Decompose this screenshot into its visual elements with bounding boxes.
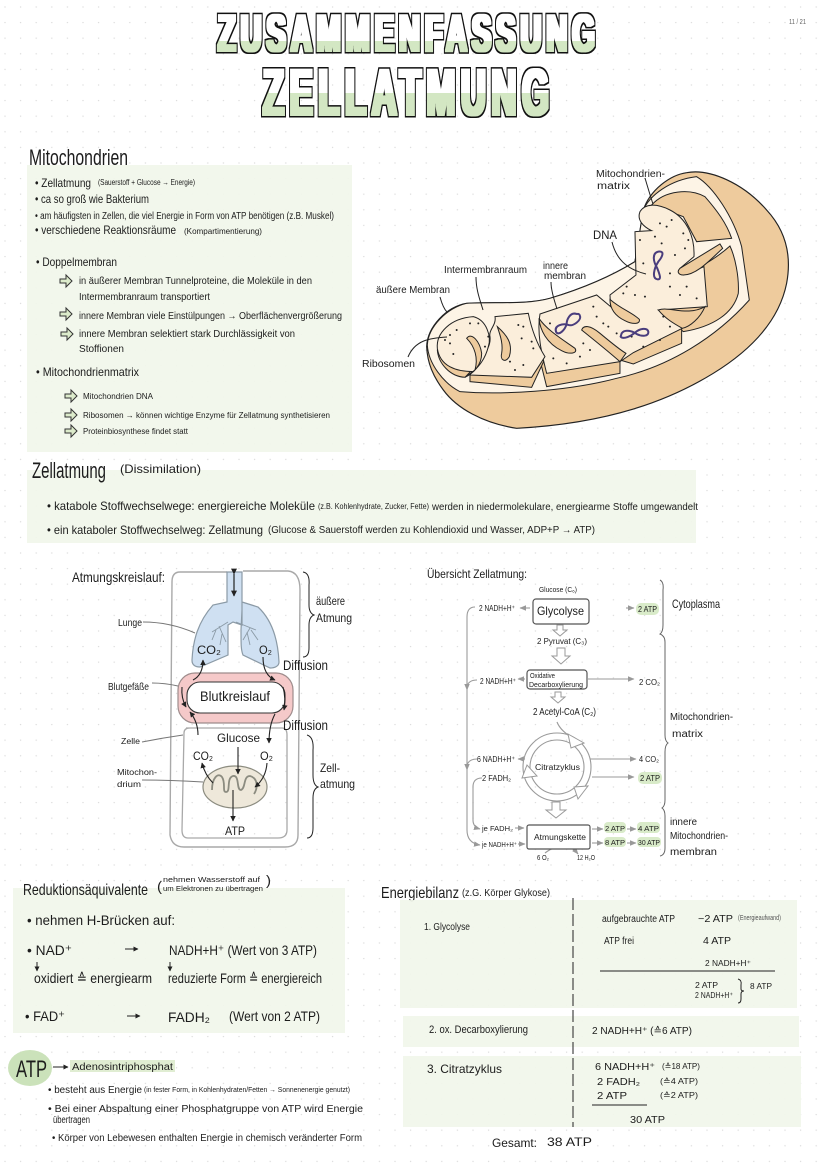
heading: Mitochondrien: Mitochondrien [29, 145, 128, 170]
icon: arrow [60, 275, 72, 287]
panel: Glycolyse balance: ATP frei [604, 936, 634, 947]
text: 2 Pyruvat: 2 Pyruvat (C₃) [537, 637, 587, 646]
row: NAD: reduzierte Form ≙ energiereich [168, 970, 322, 986]
text: ATP yields: 8 ATP [605, 840, 625, 847]
icon: breathing arrow [233, 574, 235, 596]
text: 2 CO2: 2 CO₂ [639, 678, 660, 687]
text block: general facts: • am häufigsten in Zellen, die viel Energie in Form von ATP benötigen (z.B. Muskel) [35, 211, 334, 222]
label: Ribosomen [362, 337, 447, 370]
arrows: gas exchange [182, 657, 285, 821]
label: Intermembranraum [444, 265, 527, 310]
page number: 11 / 21 [789, 19, 806, 26]
diagram: Übersicht Zellatmung [427, 567, 733, 862]
text block: general facts: • Zellatmung [35, 176, 91, 190]
cycle: Citratzyklus: Citratzyklus [535, 763, 580, 772]
icon: arrow [61, 328, 73, 340]
tan fingers [610, 299, 639, 323]
total: Gesamt 38 ATP: Gesamt: [492, 1136, 537, 1150]
text: ATP yields [605, 826, 660, 847]
cell labels [193, 731, 273, 838]
label: innere Mitochondrienmembran: membran [670, 847, 717, 858]
panel: Citratzyklus balance: 2 ATP [597, 1091, 627, 1102]
panel: Glycolyse balance [400, 900, 797, 1008]
label: äußere Atmung [316, 594, 352, 625]
blood vessel ring: Blutkreislauf [200, 688, 270, 704]
mitochondrion icon [203, 766, 267, 808]
row: NAD: • NAD⁺ [27, 942, 72, 958]
label: Mitochondrium: drium [117, 780, 141, 789]
row: NAD: NADH+H⁺ (Wert von 3 ATP) [169, 942, 317, 958]
icon: arrow [65, 390, 77, 402]
panel: Reduktionsäquivalente [13, 872, 345, 1033]
text block: Doppelmembran: • Doppelmembran [36, 255, 117, 269]
label: äußere Atmung: äußere [316, 594, 345, 608]
icon: arrow [65, 425, 77, 437]
icon: arrow [65, 409, 77, 421]
text block: general facts: • ca so groß wie Bakterium [35, 192, 149, 206]
text: 2 ATP cycle: 2 ATP [640, 774, 660, 783]
label: DNA: DNA [593, 228, 617, 242]
panel: Citratzyklus balance: 30 ATP [630, 1115, 665, 1126]
label: Cytoplasma: Cytoplasma [672, 597, 720, 611]
panel: Mitochondrien [27, 145, 352, 452]
row: FAD: (Wert von 2 ATP) [229, 1008, 320, 1024]
label: innere Membran [543, 261, 586, 309]
text block: ATP facts: • Körper von Lebewesen enthalten Energie in chemisch veränderter Form [52, 1133, 362, 1144]
diagram: Atmungskreislauf [72, 569, 355, 847]
text block: ATP facts: (in fester Form, in Kohlenhydraten/Fetten → Sonnenenergie genutzt) [144, 1087, 350, 1094]
heading: Energiebilanz [381, 885, 550, 902]
label: Intermembranraum: Intermembranraum [444, 265, 527, 276]
step: Atmungskette [527, 825, 590, 849]
text block: Mitochondrienmatrix: Proteinbiosynthese findet statt [83, 427, 189, 436]
label: Ribosomen: Ribosomen [362, 359, 415, 370]
label: Zellatmung: Zell- [320, 761, 340, 775]
step: Glycolyse [533, 599, 589, 624]
note: ) [266, 872, 271, 888]
text: Adenosintriphosphat: Adenosintriphosphat [72, 1062, 173, 1073]
icon: arrow [60, 308, 72, 320]
title: ZELLATMUNG [263, 56, 555, 130]
text block: Mitochondrienmatrix: • Mitochondrienmatrix [36, 365, 139, 379]
highlight: ATP pills [604, 603, 662, 847]
text block: catabolic pathways: werden in niedermolekulare, energiearme Stoffe umgewandelt [431, 502, 698, 513]
text: 2 NADH middle: 2 NADH+H⁺ [480, 677, 516, 686]
text: 2 Acetyl-CoA: 2 Acetyl-CoA (C₂) [533, 707, 596, 718]
label: Zelle: Zelle [121, 737, 141, 746]
text block: ATP facts [48, 1085, 363, 1144]
heading: Energiebilanz: Energiebilanz [381, 885, 459, 902]
panel: Glycolyse balance: 4 ATP [703, 936, 731, 947]
label: innere Mitochondrienmembran: innere [670, 817, 697, 828]
text block: Mitochondrienmatrix: Mitochondrien DNA [83, 392, 154, 401]
text: 6 NADH: 6 NADH+H⁺ [477, 755, 515, 764]
text block: Mitochondrienmatrix [36, 365, 330, 437]
text: ATP yields: 2 ATP [605, 826, 625, 833]
panel: Citratzyklus balance: (≙18 ATP) [662, 1062, 700, 1071]
text: 2 ATP top: 2 ATP [638, 605, 657, 614]
step: oxidative Decarboxylierung: Oxidative [530, 673, 555, 680]
icon: green circle [8, 1050, 52, 1086]
label: Mitochondrienmatrix: Mitochondrien- [596, 169, 665, 180]
text block: Doppelmembran: Stoffionen [79, 344, 124, 355]
heading: Energiebilanz: (z.G. Körper Glykose) [462, 888, 550, 899]
panel: Citratzyklus balance: 6 NADH+H⁺ [595, 1062, 655, 1073]
panel: Citratzyklus balance: 2 FADH₂ [597, 1077, 640, 1088]
title [218, 4, 600, 130]
text: 12 H2O: 12 H₂O [577, 855, 595, 862]
text block: general facts [35, 176, 334, 237]
text block: Doppelmembran: in äußerer Membran Tunnelproteine, die Moleküle in den [79, 276, 312, 287]
label: äußere Atmung: Atmung [316, 611, 352, 625]
text block: Doppelmembran: Intermembranraum transportiert [79, 292, 210, 303]
text: je FADH2 / NADH [481, 826, 517, 849]
text: ATP yields: 30 ATP [638, 840, 660, 847]
arrows: grey connectors [467, 607, 636, 854]
label: Mitochondrium: Mitochon- [117, 768, 157, 777]
panel: Glycolyse balance: 8 ATP [750, 982, 772, 991]
brace: compartments [660, 580, 668, 856]
label: Lunge [118, 618, 195, 633]
label: innere Mitochondrienmembran [670, 817, 728, 858]
text block: catabolic pathways: (z.B. Kohlenhydrate, Zucker, Fette) [318, 502, 429, 511]
step: Glycolyse: Glycolyse [537, 604, 584, 618]
text: je FADH2 / NADH: je FADH₂ [481, 826, 513, 833]
label: Zellatmung [320, 761, 355, 791]
body outline [170, 571, 300, 847]
row: NAD: oxidiert ≙ energiearm [34, 970, 152, 986]
text: 4 CO2: 4 CO₂ [639, 755, 659, 764]
label: Lunge: Lunge [118, 618, 142, 629]
blood vessel ring [178, 673, 293, 723]
label: Mitochondrienmatrix: matrix [672, 729, 703, 740]
highlight: Adenosintriphosphat [70, 1060, 175, 1072]
text: ATP: ATP [16, 1056, 47, 1083]
text block: general facts: (Kompartimentierung) [184, 227, 262, 236]
panel: Citratzyklus balance [403, 1056, 801, 1127]
text: H-Brücken: • nehmen H-Brücken auf: [27, 912, 175, 928]
text: 6 O2: 6 O₂ [537, 855, 549, 862]
brace: äußere Atmung [303, 572, 314, 657]
row: FAD: • FAD⁺ [25, 1008, 65, 1024]
step: Atmungskette: Atmungskette [534, 833, 587, 842]
step: oxidative Decarboxylierung [527, 670, 587, 689]
label: innere Membran: membran [544, 271, 586, 282]
panel: Glycolyse balance: aufgebrauchte ATP [602, 914, 675, 925]
note: um Elektronen zu übertragen [163, 886, 263, 893]
panel: Citratzyklus balance: (≙2 ATP) [660, 1091, 698, 1100]
text block: catabolic pathways: • ein kataboler Stoffwechselweg: Zellatmung [47, 523, 263, 537]
cycle: Citratzyklus [522, 722, 591, 801]
section: ATP [8, 1050, 363, 1144]
text: CO2 lung: CO₂ [197, 643, 221, 657]
text block: general facts: (Sauerstoff + Glucose → Energie) [98, 178, 195, 187]
label: Mitochondrienmatrix: Mitochondrien- [670, 712, 733, 723]
bottom tan slab edges [540, 328, 682, 387]
label: Mitochondrium [117, 768, 203, 789]
label: Diffusion upper: Diffusion [283, 657, 328, 673]
brace: Zellatmung [307, 735, 318, 838]
hollow arrows [546, 625, 570, 818]
heading: Übersicht Zellatmung: [427, 567, 527, 581]
panel: Citratzyklus balance: 3. Citratzyklus [427, 1062, 502, 1076]
label: DNA [593, 228, 646, 274]
text block: catabolic pathways [47, 499, 698, 537]
row: NAD [27, 942, 322, 986]
panel: Decarboxylierung balance: 2. ox. Decarboxylierung [429, 1024, 528, 1036]
label: Mitochondrienmatrix [670, 712, 733, 740]
row: FAD [25, 1008, 320, 1025]
DNA [556, 252, 662, 338]
text: je FADH2 / NADH: je NADH+H⁺ [481, 842, 517, 849]
cell labels: Glucose [217, 731, 260, 745]
label: Diffusion lower: Diffusion [283, 717, 328, 733]
text block: catabolic pathways: • katabole Stoffwechselwege: energiereiche Moleküle [47, 499, 315, 513]
note [157, 872, 271, 894]
panel: Decarboxylierung balance: 2 NADH+H⁺ (≙6 ATP) [592, 1025, 692, 1037]
text block: Doppelmembran [36, 255, 342, 355]
cell outline [182, 728, 287, 838]
label: äußere Membran [376, 285, 450, 312]
label: Blutgefäße: Blutgefäße [108, 682, 149, 693]
text block: ATP facts: übertragen [53, 1115, 90, 1126]
text: Glucose: Glucose (C₆) [539, 587, 577, 594]
cream crests [539, 205, 707, 373]
note: nehmen Wasserstoff auf [163, 877, 260, 884]
text block: general facts: • verschiedene Reaktionsräume [35, 223, 176, 237]
label: Zellatmung: atmung [320, 777, 355, 791]
subheading: Dissimilation: (Dissimilation) [120, 462, 201, 476]
label: Mitochondrienmatrix: matrix [597, 181, 630, 192]
label: Blutgefäße [108, 682, 178, 693]
diagram: mitochondrion [362, 169, 788, 428]
text: O2 lung: O₂ [259, 643, 272, 657]
text block: Doppelmembran: innere Membran viele Einstülpungen → Oberflächenvergrößerung [79, 311, 342, 322]
panel: Glycolyse balance: 1. Glycolyse [424, 922, 470, 933]
panel: Glycolyse balance: (Energieaufwand) [738, 915, 781, 922]
panel: Citratzyklus balance: (≙4 ATP) [660, 1077, 698, 1086]
text block: catabolic pathways: (Glucose & Sauerstoff werden zu Kohlendioxid und Wasser, ADP+P → ATP) [268, 525, 595, 536]
panel: Decarboxylierung balance [403, 1016, 799, 1047]
label: Mitochondrienmatrix [596, 169, 665, 204]
step: oxidative Decarboxylierung: Decarboxylierung [529, 682, 583, 689]
ribosome dots [444, 219, 698, 371]
heading: Reduktionsäquivalente [23, 882, 148, 899]
text: 2 FADH2: 2 FADH₂ [482, 774, 511, 783]
text: ATP yields: 4 ATP [638, 826, 659, 833]
heading: Atmungskreislauf: Atmungskreislauf: [72, 569, 165, 585]
text block: ATP facts: • besteht aus Energie [48, 1085, 142, 1096]
lungs [192, 572, 279, 668]
panel: Glycolyse balance: 2 NADH+H⁺ [695, 991, 733, 1000]
text: 2 NADH top: 2 NADH+H⁺ [479, 604, 515, 613]
arrow [53, 1066, 68, 1068]
row: FAD: FADH₂ [168, 1009, 210, 1025]
total: Gesamt 38 ATP [492, 1135, 592, 1150]
cell labels: CO₂ [193, 749, 213, 763]
label: Zelle [121, 735, 183, 746]
panel: Glycolyse balance: −2 ATP [698, 914, 733, 925]
panel: Glycolyse balance: 2 ATP [695, 981, 718, 990]
total: Gesamt 38 ATP: 38 ATP [547, 1135, 592, 1149]
title: ZUSAMMENFASSUNG [218, 4, 600, 62]
text block: ATP facts: • Bei einer Abspaltung einer Phosphatgruppe von ATP wird Energie [48, 1104, 363, 1115]
panel: Glycolyse balance: 2 NADH+H⁺ [705, 959, 751, 968]
label: innere Membran: innere [543, 261, 568, 272]
cell labels: ATP [225, 824, 245, 838]
panel: Zellatmung [27, 458, 698, 543]
label: äußere Membran: äußere Membran [376, 285, 450, 296]
cell labels: O₂ [260, 749, 273, 763]
label: innere Mitochondrienmembran: Mitochondrien- [670, 831, 728, 842]
heading: Zellatmung: Zellatmung [32, 458, 106, 483]
note: ( [157, 878, 162, 894]
text block: Doppelmembran: innere Membran selektiert stark Durchlässigkeit von [79, 329, 295, 340]
text block: Mitochondrienmatrix: Ribosomen → können wichtige Enzyme für Zellatmung synthetisieren [83, 411, 330, 420]
